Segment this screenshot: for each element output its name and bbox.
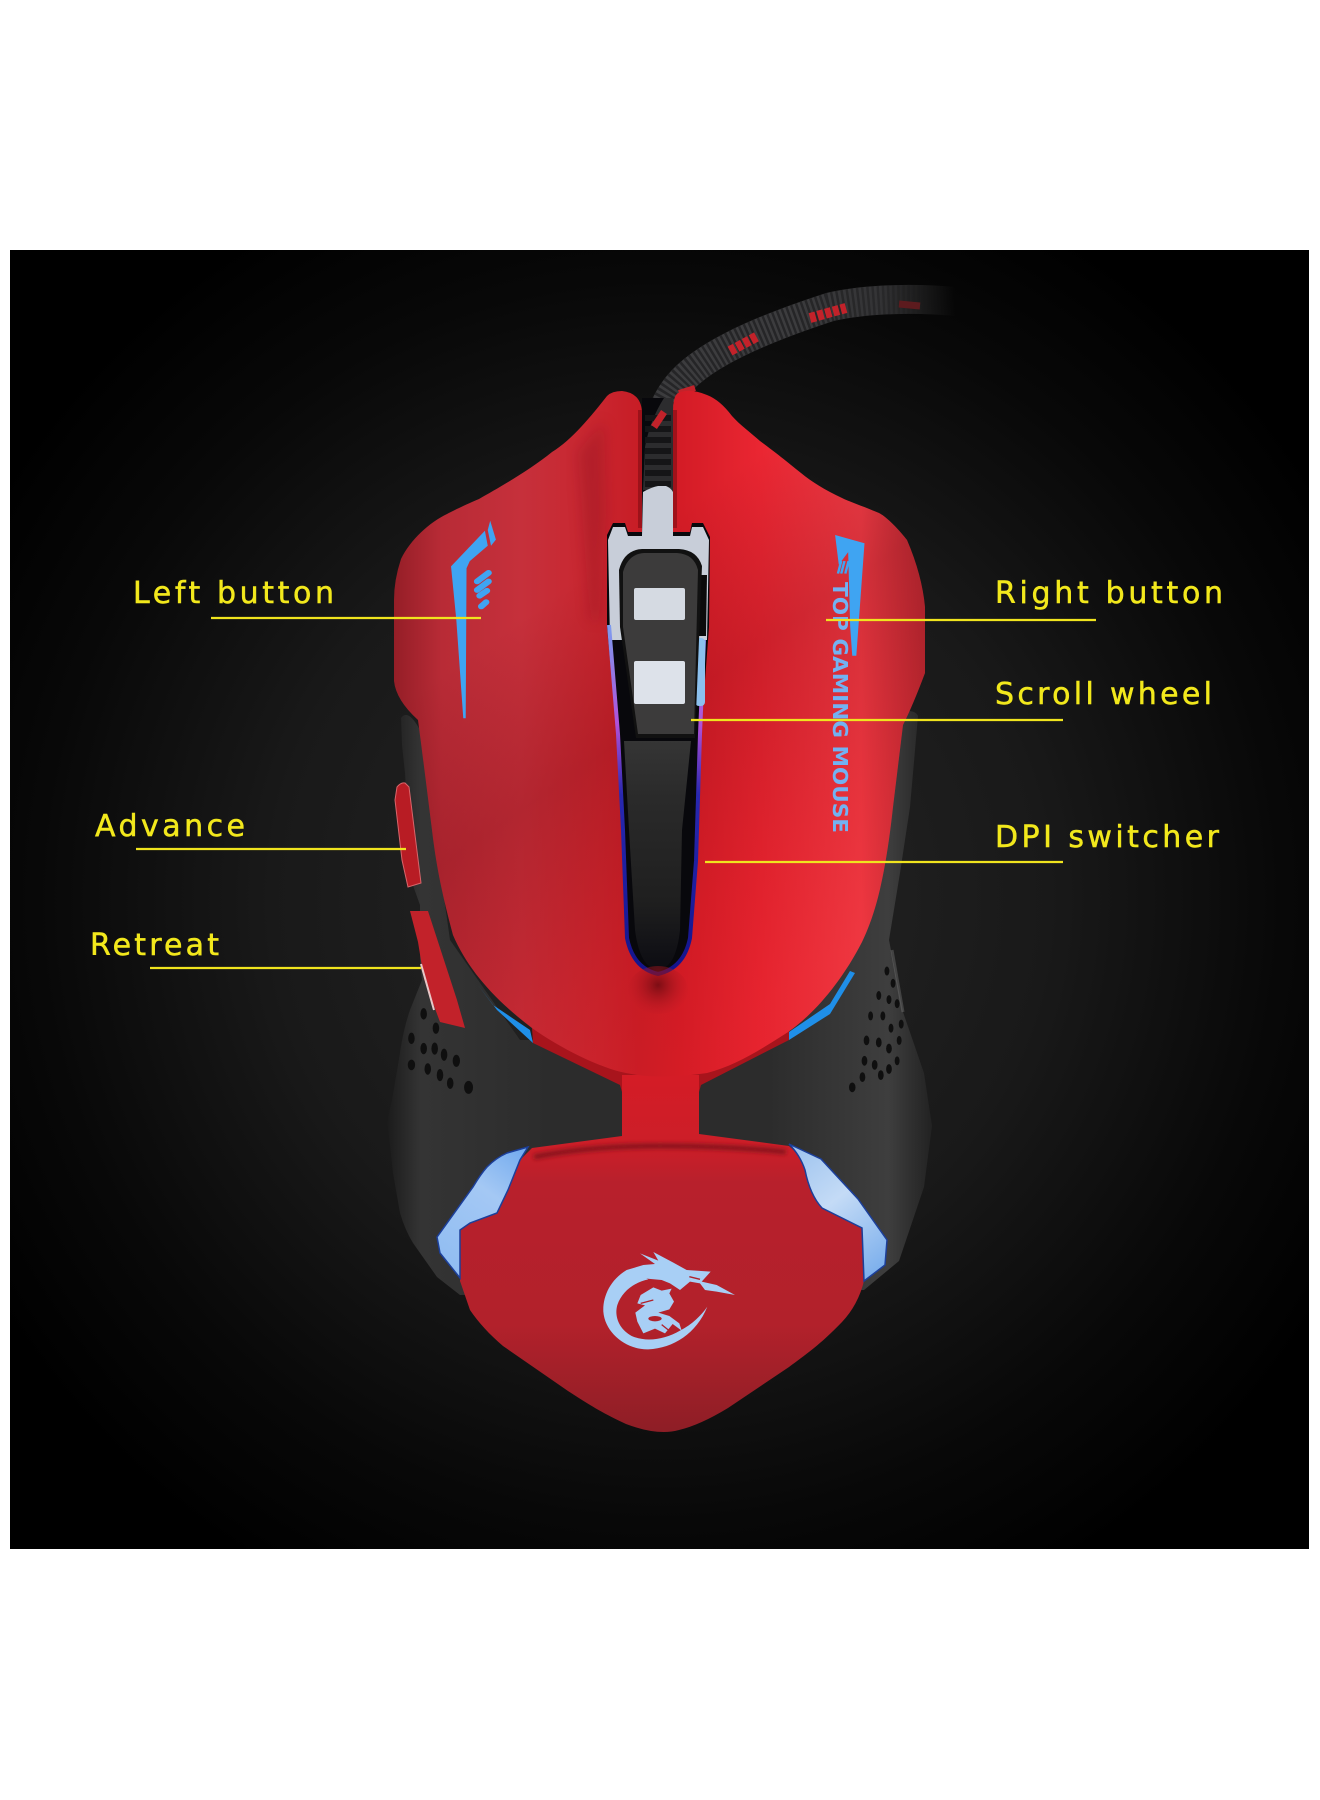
callout: retreat: Retreat — [90, 928, 219, 963]
callout: right button: Right button — [995, 576, 1223, 611]
cable inside channel — [643, 398, 673, 492]
callout: left button: Left button — [133, 576, 334, 611]
dragon logo — [603, 1252, 735, 1349]
blue light strip left — [478, 985, 533, 1043]
callout: advance: Advance — [95, 809, 245, 844]
braided cable — [660, 299, 960, 425]
grip edge highlight — [892, 950, 903, 1012]
dark red bridge — [532, 1028, 789, 1092]
left button blue logo — [451, 521, 496, 718]
red top shell with left and right buttons — [394, 391, 925, 1077]
left button ridge shading — [578, 420, 606, 620]
crease below slot — [628, 966, 688, 1014]
right button blue logo — [835, 535, 864, 656]
callout: DPI switcher: DPI switcher — [995, 820, 1220, 855]
callout: scroll wheel: Scroll wheel — [995, 677, 1212, 712]
scroll slot — [607, 398, 710, 975]
side button: retreat — [410, 911, 465, 1028]
background panel — [10, 250, 1309, 1549]
slot gap — [698, 575, 707, 636]
channel inner edges — [640, 410, 675, 528]
side button: advance — [395, 783, 421, 887]
palm rest and centre stem — [460, 1075, 864, 1432]
DPI slider — [624, 741, 691, 970]
coloured edge glow — [609, 625, 704, 974]
white translucent housing — [608, 486, 709, 640]
blue light window left — [437, 1147, 528, 1278]
mouse illustration — [388, 299, 960, 1432]
blue wheel glow — [695, 638, 705, 706]
blue light strip right — [789, 971, 855, 1040]
mouse brand text: TOP GAMING MOUSE — [828, 582, 852, 833]
blue light window right — [789, 1144, 887, 1281]
palm ridge shadow — [534, 1146, 786, 1157]
scroll wheel — [619, 549, 702, 738]
black grip body — [388, 711, 932, 1295]
grip dots — [408, 967, 904, 1094]
